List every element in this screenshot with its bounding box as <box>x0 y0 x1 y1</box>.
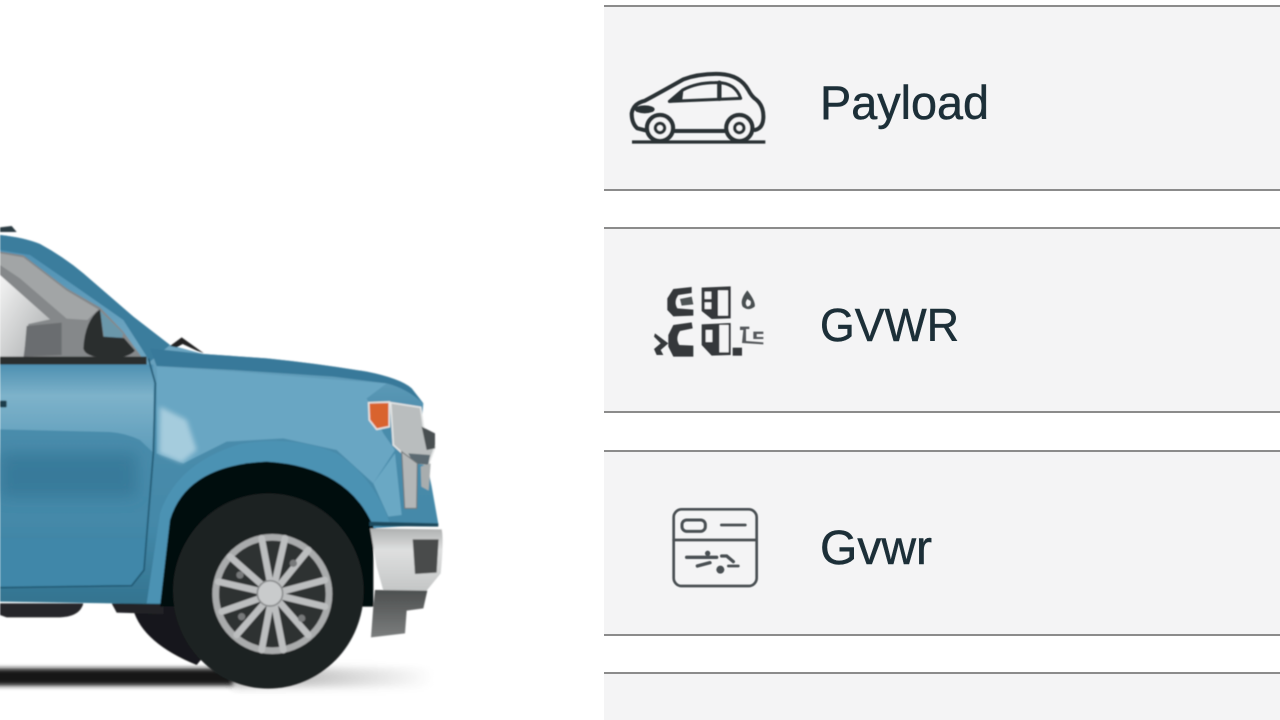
antenna <box>170 337 204 353</box>
grille strip <box>402 452 431 508</box>
panel: Gvwr <box>604 450 1280 636</box>
bumper <box>370 528 443 591</box>
wheel arch <box>160 462 373 607</box>
fender light patch <box>159 407 197 463</box>
truck illustration <box>0 226 443 689</box>
hood <box>150 348 423 403</box>
headlight <box>391 403 435 465</box>
door lower sill <box>0 538 147 587</box>
truck body <box>0 235 438 604</box>
label: Gvwr: Gvwr <box>820 522 932 575</box>
panel: payload <box>604 5 1280 191</box>
front facet <box>373 453 402 517</box>
panel: GVWR <box>604 227 1280 413</box>
roof clip <box>0 226 17 232</box>
door handle <box>0 401 7 407</box>
door shade <box>0 453 137 497</box>
tire <box>173 493 364 689</box>
icon: control card <box>674 509 757 586</box>
side window <box>0 252 147 365</box>
bumper top shadow line <box>369 522 438 527</box>
icon: car <box>632 74 765 142</box>
door seam <box>0 358 155 588</box>
panel: partial fourth row <box>604 672 1280 720</box>
mud flap <box>371 590 427 637</box>
icon: glyph blocks <box>654 286 763 357</box>
label: GVWR: GVWR <box>820 299 959 351</box>
label: Payload: Payload <box>820 76 989 129</box>
roof and A-pillar <box>0 235 170 362</box>
fog lamp recess <box>413 539 439 574</box>
wheel rim <box>216 537 329 651</box>
fender flare <box>147 441 390 603</box>
rear wheel and underbody <box>0 603 233 665</box>
door upper panel <box>0 365 154 453</box>
ground shadow <box>0 668 433 687</box>
fender highlight <box>157 367 395 483</box>
turn signal <box>369 402 389 429</box>
